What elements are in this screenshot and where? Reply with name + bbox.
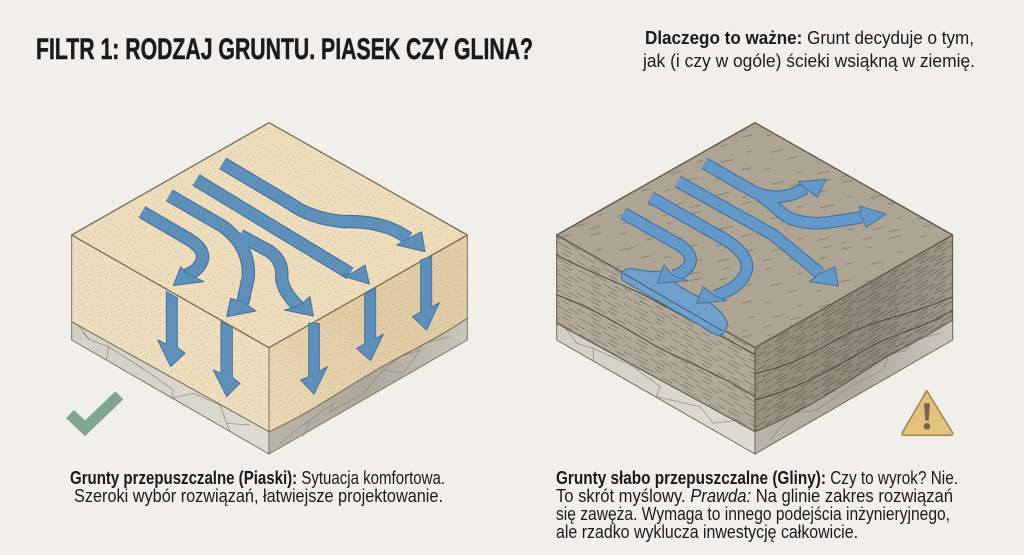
clay block: right face: [755, 235, 953, 432]
text block: permeable soils: Grunty przepuszczalne (Piaski): Sytuacja komfortowa.: [70, 468, 445, 488]
sand block: left face: [72, 235, 269, 432]
arrows: seepage down through sand: [158, 257, 439, 397]
sand block: right face: [269, 235, 467, 432]
puddle: [622, 269, 727, 336]
text block: why it matters: Dlaczego to ważne: Grunt decyduje o tym,: [645, 28, 974, 48]
icon: warning triangle: [902, 391, 953, 435]
text block: permeable soils: Szeroki wybór rozwiązań, łatwiejsze projektowanie.: [74, 486, 443, 506]
clay block: left face: [557, 235, 755, 432]
sand block: top face: [72, 123, 467, 348]
text block: low-permeability soils: [556, 468, 958, 542]
clay block: strata lines: [557, 255, 953, 400]
sand block: left face texture: [72, 235, 269, 432]
clay block: right face dashes: [755, 235, 953, 432]
panel: sand block: [70, 123, 467, 454]
arrows: surface flow on sand: [142, 163, 425, 317]
text block: low-permeability soils: Grunty słabo przepuszczalne (Gliny): Czy to wyrok? Nie.: [556, 468, 958, 488]
clay block: top face: [557, 123, 953, 348]
clay block: left face dashes: [557, 235, 755, 432]
icon: check mark: [70, 395, 119, 428]
sand block: top face texture: [72, 123, 467, 348]
clay block: rock layer: [557, 320, 953, 454]
text block: why it matters: jak (i czy w ogóle) ścieki wsiąkną w ziemię.: [642, 51, 975, 71]
text block: low-permeability soils: ale rzadko wyklucza inwestycję całkowicie.: [556, 522, 858, 542]
sand block: right face texture: [269, 235, 467, 432]
text block: why it matters: [642, 28, 975, 71]
sand block: rock layer: [72, 318, 467, 454]
text block: permeable soils: [70, 468, 445, 506]
text block: low-permeability soils: się zawęża. Wymaga to innego podejścia inżynieryjnego,: [556, 504, 950, 524]
arrows: surface flow on clay: [623, 163, 886, 303]
title: FILTR 1: RODZAJ GRUNTU. PIASEK CZY GLINA?: [36, 33, 533, 66]
text block: low-permeability soils: To skrót myślowy. Prawda: Na glinie zakres rozwiązań: [556, 486, 953, 506]
panel: clay block: [557, 123, 953, 454]
puddle: block edge: [623, 273, 723, 331]
clay block: top face dashes: [557, 123, 953, 348]
